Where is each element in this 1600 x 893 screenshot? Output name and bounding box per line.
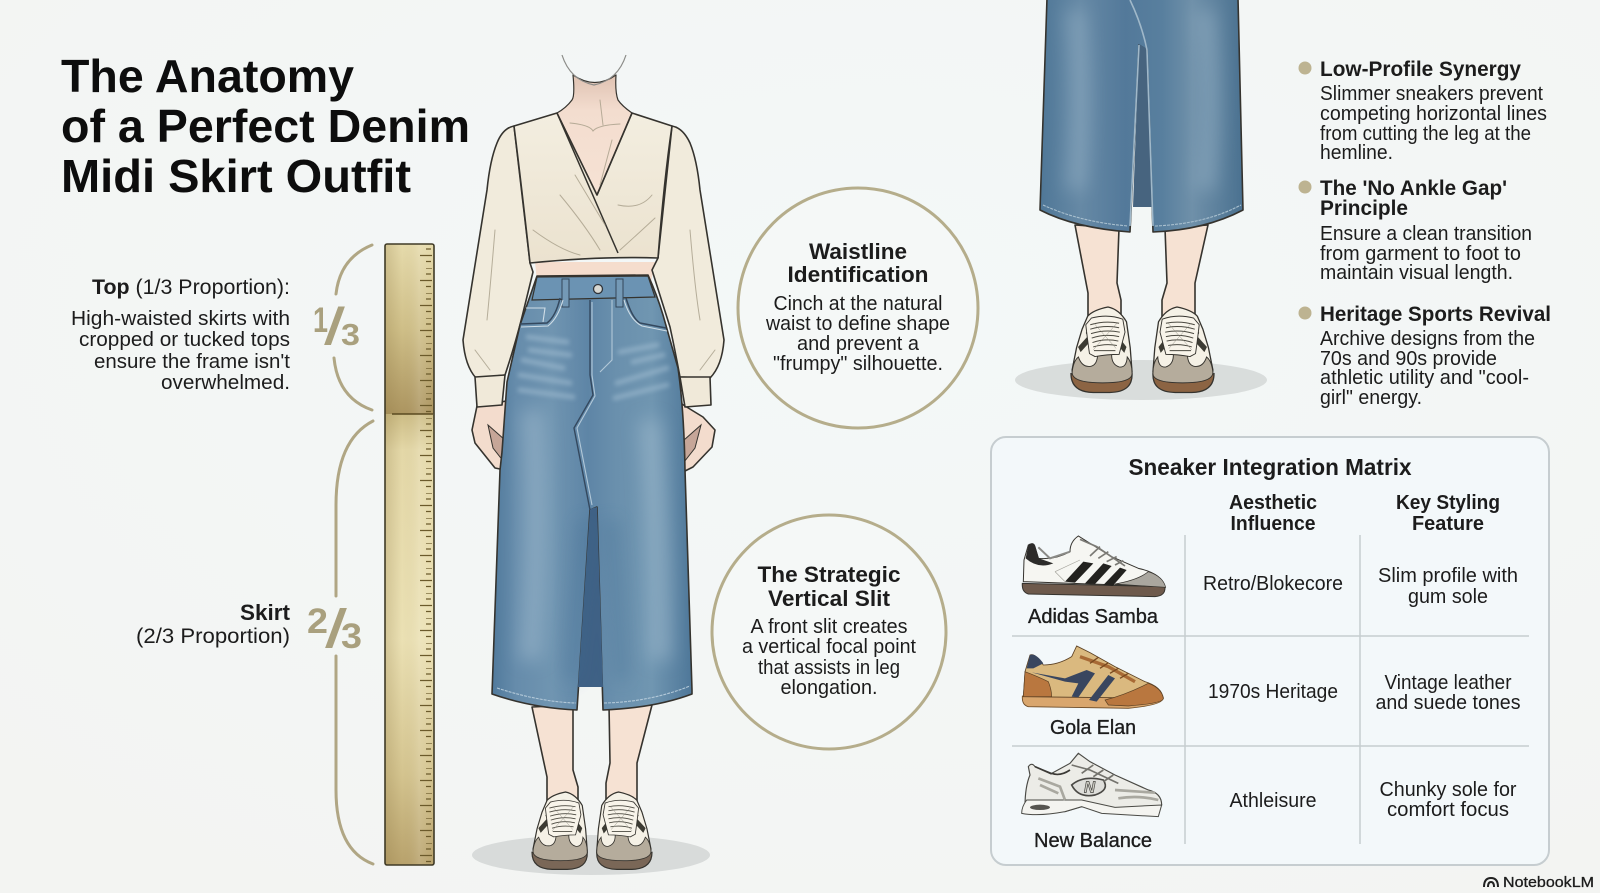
column header: aesthetic influence: Aesthetic — [1229, 492, 1317, 514]
shoes — [1071, 307, 1214, 392]
panel: sneaker integration matrix — [991, 437, 1549, 865]
bullet: heritage sports revival: athletic utility and "cool- — [1320, 367, 1529, 389]
left cuff — [475, 375, 505, 407]
skirt slit — [578, 507, 603, 687]
circle callout: strategic vertical slit: a vertical focal point — [742, 636, 916, 658]
label: one third fraction: / — [325, 298, 345, 355]
title — [61, 50, 470, 202]
shoes — [532, 792, 652, 869]
label: two thirds fraction: 3 — [341, 617, 362, 656]
ruler — [385, 244, 434, 865]
bullet: low-profile synergy: from cutting the leg at the — [1320, 123, 1531, 145]
cell: athleisure: Athleisure — [1230, 790, 1316, 812]
cell: retro blokecore: Retro/Blokecore — [1203, 573, 1343, 595]
skirt slit — [1133, 44, 1153, 207]
column header: key styling feature: Feature — [1412, 513, 1484, 535]
circle callout: waistline identification: waist to define shape — [765, 313, 950, 335]
title: Midi Skirt Outfit — [61, 150, 411, 202]
hem stitching — [1043, 205, 1241, 226]
text block: skirt proportion: Skirt — [240, 600, 291, 625]
circle callout: waistline identification: Cinch at the natural — [774, 293, 942, 315]
bullet: heritage sports revival: 70s and 90s provide — [1320, 348, 1497, 370]
bullet: low-profile synergy: Low-Profile Synergy — [1320, 58, 1521, 81]
blouse body — [514, 113, 672, 263]
bullet: heritage sports revival: girl" energy. — [1320, 387, 1422, 409]
circle callout: strategic vertical slit: that assists in leg — [758, 657, 900, 679]
text block: top proportion: overwhelmed. — [161, 372, 290, 394]
text block: top proportion: Top (1/3 Proportion): — [92, 275, 290, 299]
title: The Anatomy — [61, 50, 354, 102]
cell: 1970s heritage: 1970s Heritage — [1208, 681, 1338, 703]
bullet: no ankle gap: The 'No Ankle Gap' — [1320, 177, 1507, 200]
label: one third fraction: 3 — [341, 317, 360, 352]
hands — [472, 400, 715, 472]
bullet: no ankle gap: Ensure a clean transition — [1320, 223, 1532, 245]
proportion bracket: one third — [334, 245, 372, 410]
jawline — [562, 55, 626, 85]
bullet: low-profile synergy: competing horizontal lines — [1320, 103, 1547, 125]
figure: full outfit — [463, 55, 724, 875]
label: one third fraction — [313, 298, 360, 355]
text block: skirt proportion — [136, 600, 291, 648]
label: gola elan: Gola Elan — [1050, 717, 1136, 739]
circle callout: strategic vertical slit: Vertical Slit — [768, 586, 891, 611]
column header: key styling feature: Key Styling — [1396, 492, 1500, 514]
right cuff — [680, 377, 711, 407]
text block: top proportion: cropped or tucked tops — [79, 329, 290, 351]
bullet: low-profile synergy: hemline. — [1320, 142, 1393, 164]
icon: new balance sneaker — [1022, 753, 1162, 817]
cell: vintage leather: Vintage leather — [1384, 672, 1512, 694]
skirt details — [497, 276, 690, 703]
column header: aesthetic influence: Influence — [1230, 513, 1316, 535]
label: two thirds fraction: / — [326, 600, 346, 659]
legs — [1075, 225, 1208, 318]
cell: vintage leather — [1376, 672, 1520, 714]
circle callout: waistline identification — [738, 188, 978, 428]
label: two thirds fraction: 2 — [307, 602, 328, 641]
bullet: no ankle gap: maintain visual length. — [1320, 262, 1513, 284]
text block: top proportion: High-waisted skirts with — [71, 308, 290, 330]
bullet list: style principles — [1298, 58, 1551, 409]
cell: slim profile: Slim profile with — [1378, 565, 1518, 587]
blouse wrap and folds — [475, 100, 715, 370]
text block: top proportion: ensure the frame isn't — [94, 351, 290, 373]
bullet: no ankle gap: from garment to foot to — [1320, 243, 1521, 265]
label: new balance: New Balance — [1034, 830, 1152, 852]
circle callout: waistline identification: "frumpy" silhouette. — [773, 353, 943, 375]
circle callout: strategic vertical slit — [712, 515, 946, 749]
text block: skirt proportion: (2/3 Proportion) — [136, 624, 290, 648]
circle callout: waistline identification: Waistline — [809, 239, 907, 264]
proportion bracket: two thirds — [336, 421, 373, 864]
denim skirt — [492, 275, 692, 710]
bullet: low-profile synergy — [1298, 58, 1547, 164]
bullet: heritage sports revival — [1298, 303, 1551, 409]
circle callout: waistline identification: and prevent a — [797, 333, 920, 355]
label: two thirds fraction — [307, 600, 362, 659]
front seam — [1130, 0, 1153, 226]
bullet: no ankle gap: Principle — [1320, 197, 1408, 220]
bullet: low-profile synergy: Slimmer sneakers prevent — [1320, 83, 1543, 105]
text block: top proportion — [71, 275, 290, 394]
denim skirt hem — [1040, 0, 1243, 232]
bullet: heritage sports revival: Heritage Sports Revival — [1320, 303, 1551, 326]
cell: slim profile — [1378, 565, 1518, 608]
circle callout: strategic vertical slit: A front slit creates — [750, 616, 908, 638]
matrix title: Sneaker Integration Matrix — [1128, 454, 1412, 480]
circle callout: strategic vertical slit: elongation. — [780, 677, 878, 699]
icon: adidas samba sneaker — [1022, 536, 1166, 597]
circle callout: strategic vertical slit: The Strategic — [758, 562, 900, 587]
left sleeve — [463, 126, 533, 378]
neck and chest — [557, 75, 632, 195]
midriff — [535, 262, 655, 282]
title: of a Perfect Denim — [61, 100, 470, 152]
right sleeve — [652, 126, 724, 378]
label: adidas samba: Adidas Samba — [1028, 606, 1159, 628]
denim shading — [1075, 10, 1210, 190]
bullet: heritage sports revival: Archive designs from the — [1320, 328, 1535, 350]
cell: vintage leather: and suede tones — [1376, 692, 1520, 714]
column header: key styling feature — [1396, 492, 1500, 535]
cell: slim profile: gum sole — [1408, 586, 1488, 608]
icon: gola elan sneaker — [1022, 646, 1163, 708]
icon: new balance sneaker: N — [1084, 779, 1096, 796]
cell: chunky sole — [1380, 779, 1517, 821]
bullet: no ankle gap — [1298, 177, 1532, 284]
ground shadow — [1015, 360, 1267, 400]
legs — [532, 705, 652, 805]
logo: notebooklm: NotebookLM — [1503, 874, 1594, 891]
ground shadow — [472, 835, 710, 875]
cell: chunky sole: comfort focus — [1387, 799, 1509, 821]
label: one third fraction: 1 — [313, 301, 328, 340]
cell: chunky sole: Chunky sole for — [1380, 779, 1517, 801]
figure: skirt hem and sneakers detail — [1015, 0, 1267, 400]
column header: aesthetic influence — [1229, 492, 1317, 535]
circle callout: waistline identification: Identification — [788, 262, 928, 287]
